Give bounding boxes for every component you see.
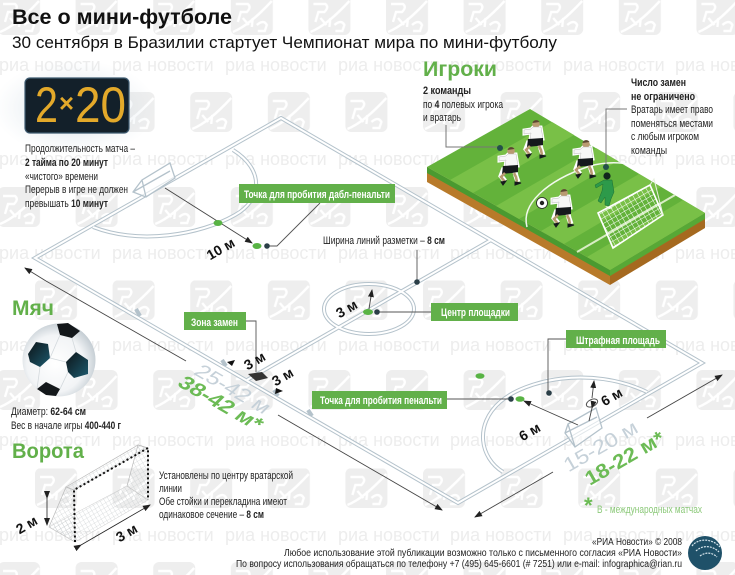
panel: match duration [0,60,157,210]
watermark background: риа новости [338,149,440,169]
substitutions text: Число замен [631,77,686,89]
dimension: center circle 3 m: 3 м [333,296,360,321]
label: penalty area: Штрафная площадь [576,335,660,347]
dimension: goal width: 3 м [113,520,140,545]
duration text: превышать 10 минут [25,198,108,210]
watermark background: риа новости [338,243,440,263]
substitutions text: поменяться местами [631,118,713,130]
goal text: одинаковое сечение – 8 см [159,509,264,521]
goal diagram [47,445,150,545]
dimension: penalty 6 m left: 6 м [516,419,543,444]
watermark background: риа новости [563,149,665,169]
watermark background: риа новости [225,430,327,450]
dot: players [497,145,503,151]
dark dot: double penalty [264,243,270,249]
watermark background: риа новости [338,525,440,545]
watermark background: риа новости [450,525,552,545]
right field goal [565,408,602,447]
dimension: goal height: 2 м [13,512,40,537]
measurement arrows [25,188,722,517]
green point: far penalty [476,373,484,379]
icon: scoreboard [25,77,129,133]
watermark background: риа новости [112,55,214,75]
watermark background: риа новости [0,55,101,75]
label: substitution zone [184,312,256,372]
goal text: Установлены по центру вратарской [159,470,293,482]
dimension: width 18-22 m: 18-22 м* [581,427,669,490]
watermark background: риа новости [112,430,214,450]
ball specs: Диаметр: 62-64 см [11,406,86,418]
ball specs [11,406,121,432]
court lines outer stroke [35,118,702,503]
player 2 [499,147,521,185]
watermark background: риа новости [563,430,665,450]
goalkeeper [595,172,614,209]
label: double penalty point [239,184,395,246]
watermark background: риа новости [338,335,440,355]
label: penalty area [546,330,666,396]
footer credits [236,537,682,570]
players text left: по 4 полевых игрока [423,99,504,111]
dark dot: penalty point [508,396,514,402]
label: penalty point: Точка для пробития пенальти [320,395,442,407]
watermark background: риа новости [112,525,214,545]
substitution zone markers [227,360,283,394]
icon: RIA globe logo [688,536,722,570]
watermark background: риа новости [338,55,440,75]
panel: goal [12,440,293,545]
duration text [25,143,136,210]
watermark background: риа новости [450,55,552,75]
icon: scoreboard: × [59,88,74,118]
watermark background: риа новости [563,525,665,545]
watermark background: риа новости [225,525,327,545]
subtitle: 30 сентября в Бразилии стартует Чемпионат мира по мини-футболу [12,34,558,52]
players text left: и вратарь [423,112,461,124]
leader: substitutions [606,109,627,166]
pitch goal [598,179,663,248]
watermark background: риа новости [112,243,214,263]
footer credits: Любое использование этой публикации возможно только с письменного согласия «РИА Новости» [284,547,682,559]
label: line width [323,235,445,285]
watermark background: риа новости [0,335,101,355]
watermark background: риа новости [225,335,327,355]
duration text: Продолжительность матча – [25,143,136,155]
watermark background: риа новости [563,243,665,263]
court lines inner stroke [35,118,702,503]
icon: scoreboard: 2 [35,77,58,133]
player 3 [574,140,596,178]
dot: substitutions [603,164,609,170]
scoreboard glow [0,60,157,156]
green point: double penalty [252,243,262,249]
watermark background: риа новости [563,335,665,355]
watermark background: риа новости [225,243,327,263]
icon: soccer ball [22,323,96,396]
watermark background: риа новости [0,525,101,545]
label: double penalty point: Точка для пробития дабл-пенальти [244,189,390,201]
isometric pitch [427,109,705,285]
label: substitution zone: Зона замен [191,317,238,329]
pitch ball [536,198,548,208]
substitutions text: не ограничено [631,91,695,103]
green point: 10 m mark [214,220,222,226]
label: court center [363,303,518,321]
watermark background: риа новости [225,55,327,75]
watermark background: риа новости [450,149,552,169]
title: Все о мини-футболе [12,5,232,29]
icon: scoreboard: 20 [75,77,126,133]
player 4 [552,189,574,227]
goal keeper ellipse [585,397,599,409]
footnote [584,493,702,518]
substitutions text [631,77,713,157]
label: court center: Центр площадки [441,307,510,319]
watermark background: риа новости [450,335,552,355]
dimension: zone 3 m right: 3 м [269,364,296,389]
watermark background: риа новости [112,149,214,169]
watermark background: риа новости [0,149,101,169]
duration text: «чистого» времени [25,171,98,183]
heading: goal: Ворота [12,440,84,463]
green point: penalty [516,396,524,402]
dimension: width 15-20 m: 15-20 м [560,417,642,477]
players text left [423,85,504,124]
goal text: линии [159,483,182,495]
watermark background: риа новости [0,430,101,450]
watermark background: риа новости [0,243,101,263]
dimension: 10 m: 10 м [204,234,237,263]
duration text: Перерыв в игре не должен [25,184,128,196]
footnote: В - международных матчах [597,504,702,516]
goal text: Обе стойки и перекладина имеют [159,496,287,508]
duration text: 2 тайма по 20 минут [25,157,108,169]
dimension: zone 3 m left: 3 м [241,348,268,373]
leader: players [446,125,500,147]
diagram: futsal court [35,118,702,503]
ball specs: Вес в начале игры 400-440 г [11,420,121,432]
dimension: penalty 6 m right: 6 м [598,384,625,409]
watermark background: риа новости [338,430,440,450]
watermark background: риа новости [450,430,552,450]
watermark background: риа новости [112,335,214,355]
left field goal [133,163,175,197]
footnote: * [584,493,593,518]
heading: ball: Мяч [12,297,54,320]
player 1 [524,120,546,158]
watermark background: риа новости [225,149,327,169]
watermark background: риа новости [563,55,665,75]
label: line width: Ширина линий разметки – 8 см [323,235,445,247]
substitutions text: с любым игроком [631,131,699,143]
players text left: 2 команды [423,85,471,97]
dimension: length 25-42 m: 25-42 м [189,361,276,418]
panel: players [423,58,713,285]
watermark background: риа новости [450,243,552,263]
goal text [159,470,293,521]
footer credits: «РИА Новости» © 2008 [592,537,682,548]
substitutions text: команды [631,145,667,157]
panel: ball [11,297,121,432]
heading: players: Игроки [423,58,497,81]
label: penalty point [312,391,512,409]
dimension: length 38-42 m: 38-42 м* [173,373,268,435]
